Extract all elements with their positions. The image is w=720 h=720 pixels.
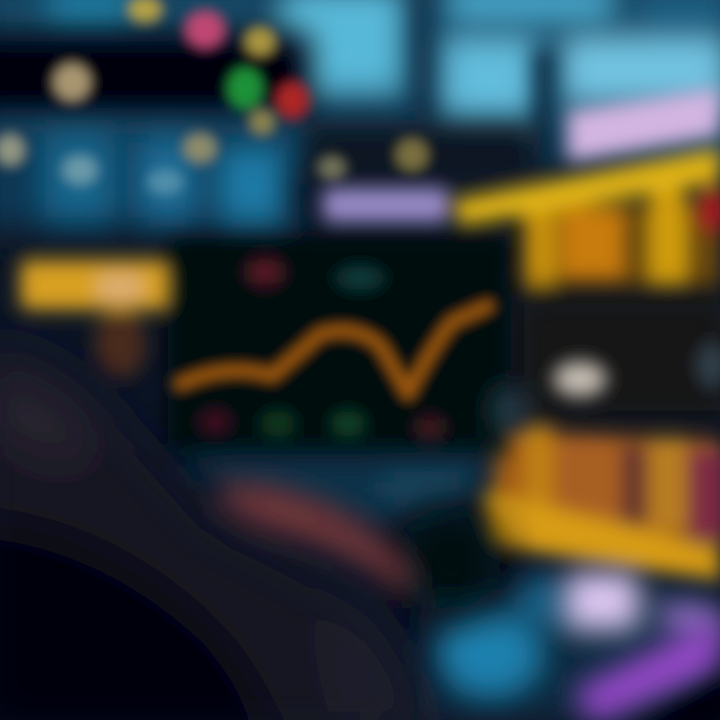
yellow upper shelf: [452, 148, 720, 294]
lavender panel: [322, 188, 450, 222]
orange lower shelf: [480, 425, 720, 582]
keyboard glow: [160, 390, 520, 530]
dark pillars: [410, 0, 556, 160]
dark sleeve by hand: [398, 508, 502, 612]
screen indicators: [199, 258, 446, 440]
person silhouette: [0, 345, 430, 720]
row of blue tiles: [0, 125, 510, 250]
coloured indicator dots: [0, 0, 429, 194]
white blob on right panel: [554, 341, 720, 396]
background: upper blue room: [0, 0, 720, 160]
lilac lower-right panel: [565, 572, 720, 640]
yellow left label: [20, 260, 170, 379]
lower-right blue floor: [420, 574, 720, 720]
purple diagonal band: [575, 618, 720, 720]
dark band with indicators: [0, 34, 540, 185]
laptop screen: [168, 240, 508, 456]
black bottom-right corner: [625, 672, 720, 720]
orange line chart: [180, 306, 488, 394]
hand: [212, 484, 418, 590]
pink upper-right panel: [568, 88, 720, 162]
dark right mid panel: [515, 295, 720, 420]
